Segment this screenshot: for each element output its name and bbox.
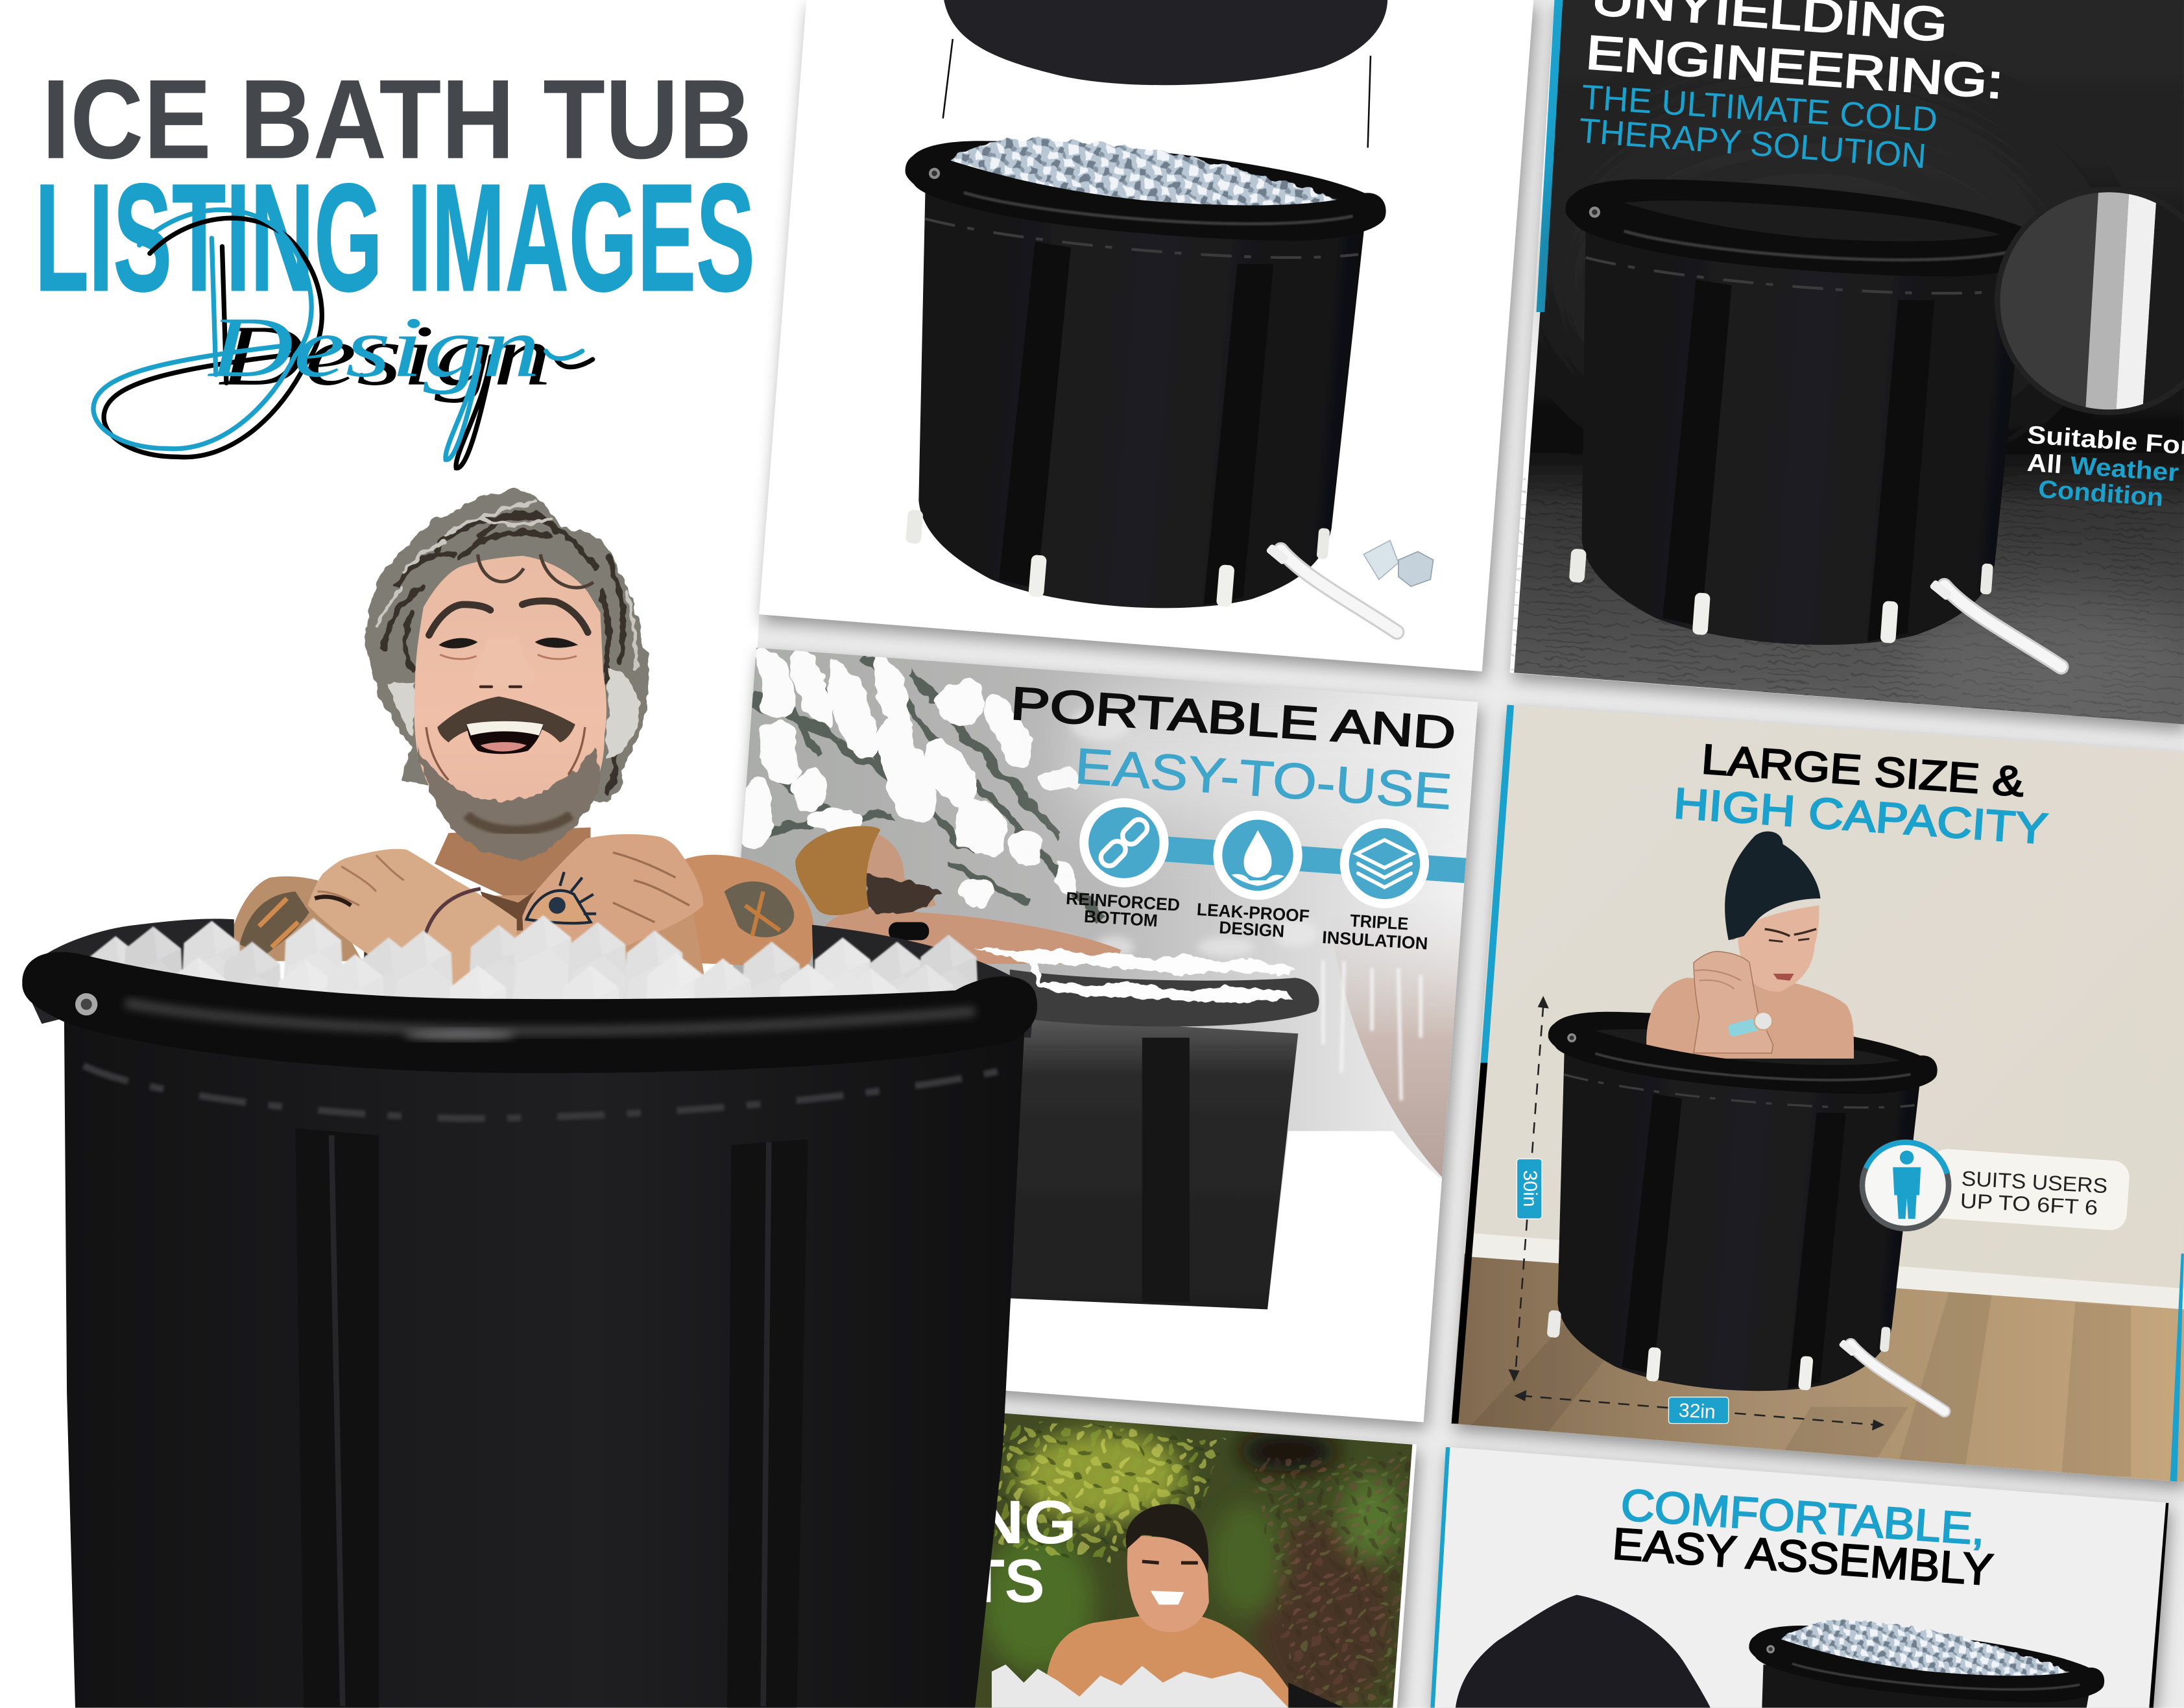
woman	[1646, 832, 1854, 1059]
lid strings	[943, 39, 1371, 148]
heading: unyielding engineering: THE ULTIMATE COLD	[1580, 78, 1939, 139]
right hand and forearm	[522, 834, 703, 996]
callout text: suitable for all weather condition: All	[2026, 449, 2063, 479]
heading: portable and easy-to-use: PORTABLE AND	[1009, 678, 1458, 760]
callout text: suitable for all weather condition	[2026, 421, 2184, 512]
smile lines	[426, 727, 585, 780]
baseboard	[1465, 1233, 2184, 1309]
heading: portable and easy-to-use	[1009, 678, 1458, 820]
icon: reinforced bottom	[1079, 798, 1169, 887]
callout circle: material detail	[1995, 181, 2184, 418]
callout: suits users up to 6ft 6: SUITS USERS	[1961, 1166, 2108, 1197]
icon: triple insulation	[1340, 819, 1429, 908]
snow ground	[703, 1131, 1456, 1422]
heading: comfortable, easy assembly	[1611, 1480, 1995, 1595]
script shadow layer	[104, 218, 593, 468]
feature labels: INSULATION	[1321, 928, 1428, 954]
face	[1738, 906, 1819, 992]
right edge stripe	[2170, 1254, 2184, 1482]
beard	[416, 744, 601, 860]
seam: right	[727, 1139, 808, 1708]
feature labels: BOTTOM	[1083, 907, 1158, 930]
eyebrows	[429, 601, 588, 635]
callout: suits users up to 6ft 6	[1860, 1139, 2130, 1231]
left finger lines	[318, 855, 404, 906]
under-eye lines	[440, 655, 577, 659]
callout text: suitable for all weather condition: Weather	[2069, 451, 2179, 487]
dimension: width 32in: 32in	[1678, 1400, 1716, 1423]
feature labels: TRIPLE	[1349, 911, 1409, 933]
panel: portable and easy-to-use	[703, 644, 1478, 1422]
icon: lid	[943, 0, 1387, 85]
smiling man	[1044, 1504, 1302, 1708]
feature labels: LEAK-PROOF	[1196, 900, 1310, 926]
rim highlight	[125, 1003, 975, 1031]
rim hot spot	[404, 1030, 516, 1040]
right finger lines	[613, 852, 690, 922]
leaf texture	[996, 1421, 1226, 1560]
script top layer: Design	[207, 299, 540, 395]
dark gap under left hand	[362, 933, 418, 1003]
feature labels	[1065, 889, 1428, 954]
heading: comfortable, easy assembly: COMFORTABLE,	[1619, 1480, 1987, 1554]
tub	[1566, 179, 2069, 675]
closed eyes and brows	[1765, 929, 1816, 936]
feature band	[1153, 836, 1467, 883]
feature labels: DESIGN	[1219, 918, 1285, 941]
callout text: suitable for all weather condition: Suitable For	[2026, 421, 2184, 460]
right shoulder	[654, 855, 815, 968]
tub back rim: right	[812, 925, 1035, 1038]
panel: comfortable, easy assembly	[1430, 1447, 2168, 1708]
ice crystals	[85, 915, 979, 1054]
tub in snow	[1007, 970, 1319, 1309]
icon: person	[1893, 1151, 1921, 1219]
hair	[366, 489, 649, 802]
face	[414, 556, 606, 851]
hair	[1725, 832, 1821, 940]
heading: unyielding engineering: ENGINEERING:	[1584, 26, 2005, 108]
bracelet	[425, 889, 481, 936]
snowy trees photo	[737, 644, 1100, 919]
right tattoo	[725, 882, 794, 937]
partial heading	[968, 1488, 1077, 1615]
foreground man in ice bath	[227, 489, 815, 1010]
heading: unyielding engineering	[1578, 0, 2005, 176]
partial heading: TS	[968, 1546, 1044, 1615]
icon: loose ice cubes	[1363, 540, 1434, 586]
heading: large size and high capacity: HIGH CAPACITY	[1672, 780, 2049, 854]
pale hair tufts	[387, 669, 639, 759]
wood floor	[1451, 1254, 2184, 1482]
partial heading: NG	[975, 1488, 1077, 1557]
feature labels: REINFORCED	[1065, 889, 1181, 915]
eyes	[438, 638, 578, 648]
moustache	[437, 697, 575, 743]
ice and tub rim	[992, 1665, 1288, 1708]
left hand and forearm	[308, 849, 517, 996]
left edge stripes	[1481, 705, 1514, 1063]
nose	[471, 638, 536, 687]
forehead curls	[478, 555, 594, 588]
heading: comfortable, easy assembly: EASY ASSEMBLY	[1611, 1519, 1995, 1595]
dimension: height 30in: 30in	[1519, 1170, 1541, 1207]
dimension: width 32in	[1514, 1390, 1884, 1430]
ear	[1727, 912, 1739, 940]
wooden tub background	[1330, 891, 1476, 1184]
dimension: height 30in	[1509, 996, 1549, 1382]
tub front rim	[22, 952, 1037, 1073]
shoulders	[1646, 978, 1854, 1059]
heading: ice bath tub: ICE BATH TUB	[42, 56, 752, 182]
heading: large size and high capacity	[1672, 736, 2049, 854]
panel: man soaking outdoors	[968, 1411, 1417, 1708]
packed cover bag	[1456, 1595, 1710, 1708]
script top layer	[93, 210, 582, 460]
panel: unyielding engineering	[1510, 0, 2184, 725]
panel: white product shot with lid	[759, 0, 1533, 671]
foliage	[982, 1432, 1402, 1708]
chest	[365, 891, 710, 1010]
tub with ice	[906, 136, 1405, 640]
seam: left	[295, 1128, 379, 1708]
tub with ice	[1746, 1611, 2108, 1708]
watch	[1727, 1017, 1763, 1037]
script shadow layer: Design	[219, 307, 551, 403]
hair strands	[376, 501, 636, 794]
callout text: suitable for all weather condition: Condition	[2037, 475, 2165, 512]
tub body	[64, 1010, 1025, 1708]
gutter background	[703, 0, 2184, 1708]
nostrils	[481, 686, 521, 688]
heading: unyielding engineering: THERAPY SOLUTION	[1578, 111, 1928, 176]
foreground tub	[22, 915, 1037, 1708]
left tattoo	[239, 891, 309, 956]
heading: portable and easy-to-use: EASY-TO-USE	[1073, 738, 1454, 820]
lips	[1773, 974, 1794, 981]
heading: large size and high capacity: LARGE SIZE &	[1700, 736, 2026, 805]
bearded man in beanie	[795, 826, 1122, 964]
tub with woman	[1518, 832, 1976, 1412]
callout: suits users up to 6ft 6: UP TO 6FT 6	[1960, 1189, 2098, 1220]
tub back rim: left	[22, 919, 234, 1024]
collar wrinkles	[84, 1066, 1005, 1118]
neck	[435, 827, 590, 902]
script word: design	[93, 210, 593, 468]
left shoulder	[227, 876, 362, 961]
icicles	[1323, 961, 1421, 1100]
clasped hands	[1694, 952, 1773, 1053]
panel: large size and high capacity	[1451, 705, 2184, 1482]
valve	[75, 993, 97, 1015]
mouth	[466, 721, 543, 754]
heading: listing images: LISTING IMAGES	[35, 152, 755, 324]
eye tattoo on hand	[527, 872, 596, 923]
icon: leak-proof design	[1213, 811, 1302, 900]
snow on tub rim	[972, 947, 1295, 1003]
